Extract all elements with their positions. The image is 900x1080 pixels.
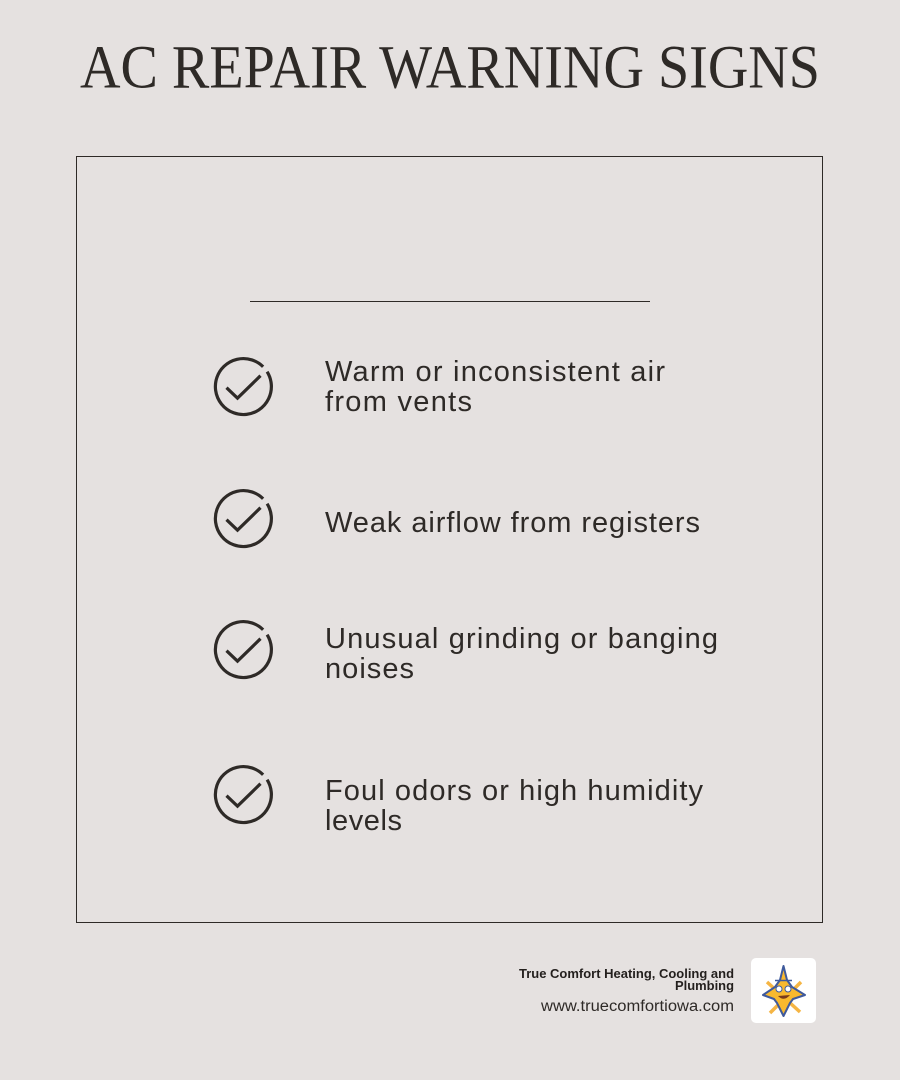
website: www.truecomfortiowa.com: [540, 998, 734, 1015]
icon: check circle: [215, 622, 271, 678]
text: weak airflow: Weak airflow from registers: [325, 507, 700, 539]
company name: [519, 966, 734, 993]
icon: check circle: [215, 767, 271, 823]
company name: Plumbing: [675, 978, 734, 993]
footer: company: [519, 958, 816, 1023]
title: AC REPAIR WARNING SIGNS: [80, 34, 820, 102]
text: noises: [325, 623, 718, 685]
panel: warning signs: [76, 156, 822, 922]
icon: check circle: [215, 491, 271, 547]
company name: True Comfort Heating, Cooling and: [519, 966, 734, 981]
list item: warm air: [215, 356, 665, 418]
text: warm air: [325, 356, 665, 418]
icon: check circle: [215, 359, 271, 415]
logo: [751, 958, 816, 1023]
text: odors: Foul odors or high humidity: [325, 775, 704, 807]
text: odors: [325, 775, 704, 837]
text: noises: Unusual grinding or banging: [325, 623, 718, 655]
text: odors: levels: [325, 805, 402, 837]
text: noises: noises: [325, 653, 414, 685]
list item: noises: [215, 622, 718, 685]
list item: odors: [215, 767, 703, 837]
list item: weak airflow: [215, 491, 700, 547]
text: warm air: from vents: [325, 386, 472, 418]
text: warm air: Warm or inconsistent air: [325, 356, 665, 388]
